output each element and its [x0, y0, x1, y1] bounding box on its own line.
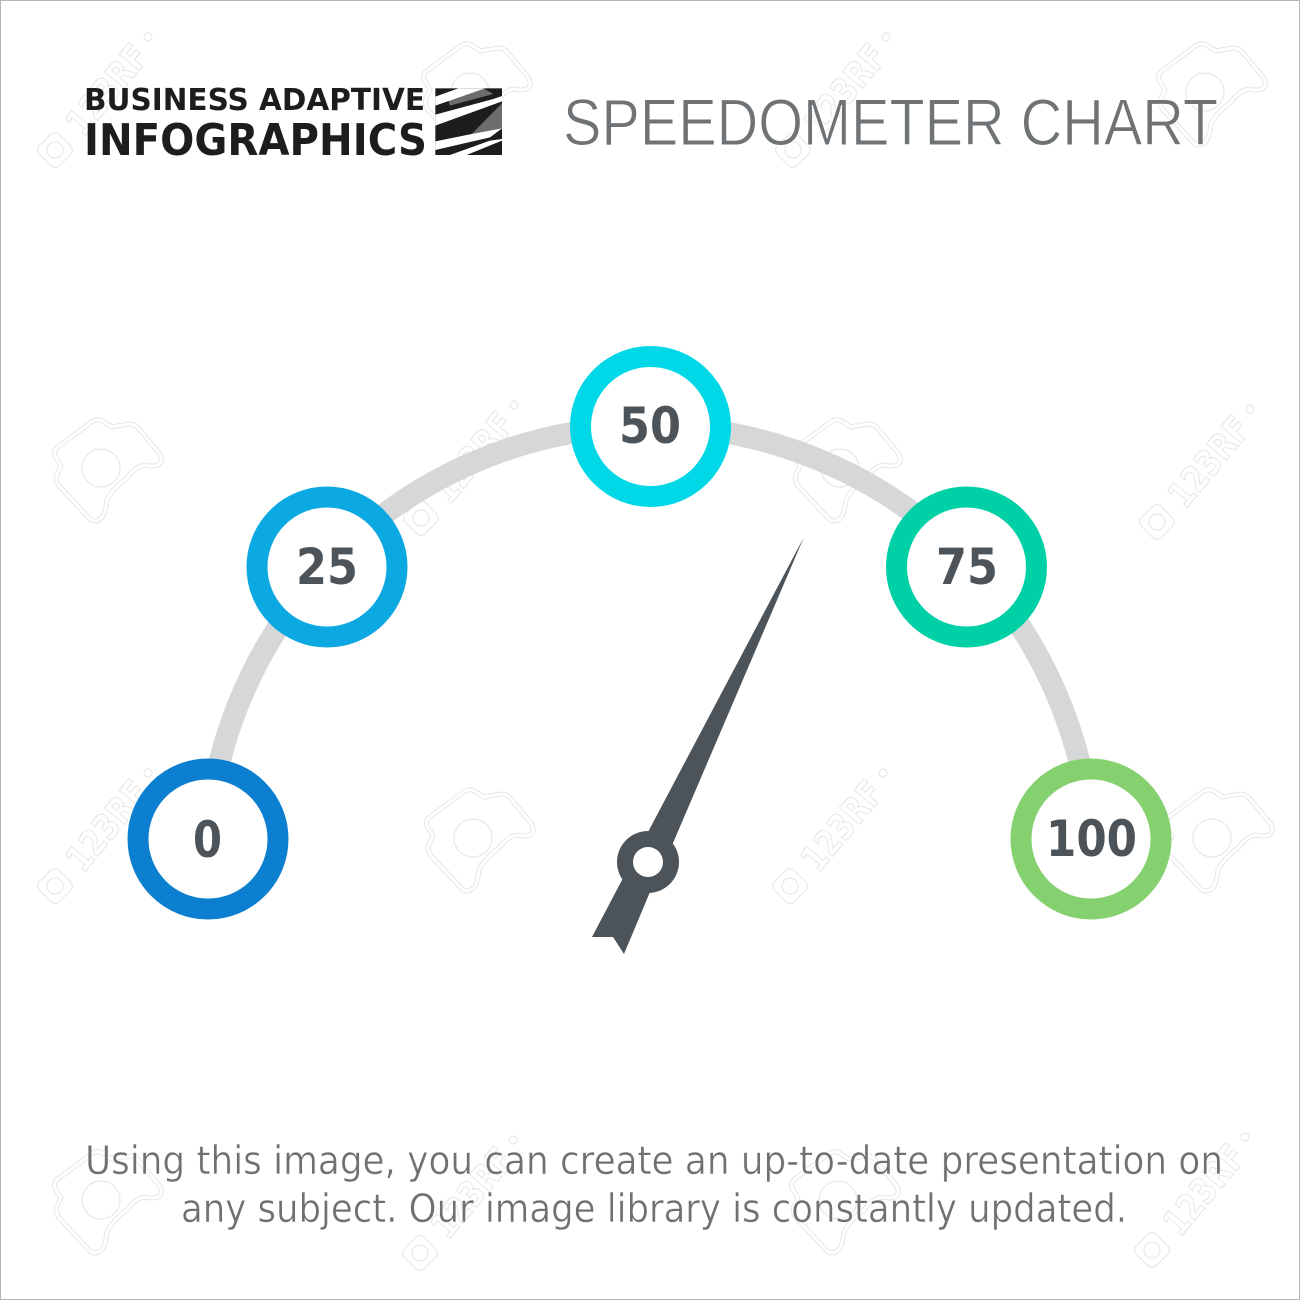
watermark: row 1: 123RF	[796, 37, 895, 144]
icon: logo striped square	[435, 88, 502, 155]
gauge node: 50: 50	[619, 397, 681, 455]
watermark: row 1: 123RF	[58, 37, 157, 144]
watermark: row 2: 123RF	[424, 405, 523, 512]
gauge node: 0: 0	[193, 811, 222, 869]
watermark: row 4: 123RF	[423, 1140, 522, 1247]
description text	[85, 1139, 1223, 1232]
gauge node: 100: 100	[1046, 810, 1137, 868]
gauge node: 75	[896, 497, 1036, 637]
watermark: row 3	[35, 769, 1272, 906]
logo text: infographics: INFOGRAPHICS	[84, 115, 427, 166]
watermark: row 4	[54, 1133, 1254, 1273]
logo	[84, 83, 502, 166]
needle	[592, 537, 804, 954]
gauge node: 25	[257, 497, 397, 637]
description text: any subject. Our image library is constantly updated.	[181, 1187, 1127, 1232]
logo text: business adaptive: BUSINESS ADAPTIVE	[84, 83, 425, 118]
watermark: row 2	[54, 401, 1259, 542]
watermark: row 3: 123RF	[793, 773, 892, 880]
gauge node: 50	[580, 356, 720, 496]
watermark: row 1	[35, 33, 1265, 170]
gauge node: 75: 75	[936, 538, 998, 596]
gauge node: 0	[138, 769, 278, 909]
gauge node: 100	[1021, 769, 1161, 909]
watermark: row 4: 123RF	[1155, 1137, 1254, 1244]
title: SPEEDOMETER CHART	[563, 85, 1218, 159]
watermark: row 3: 123RF	[58, 773, 157, 880]
watermark: row 2: 123RF	[1160, 409, 1259, 516]
gauge arc track	[206, 426, 1092, 869]
gauge node: 25: 25	[296, 538, 358, 596]
description text: Using this image, you can create an up-to-date presentation on	[85, 1139, 1223, 1184]
